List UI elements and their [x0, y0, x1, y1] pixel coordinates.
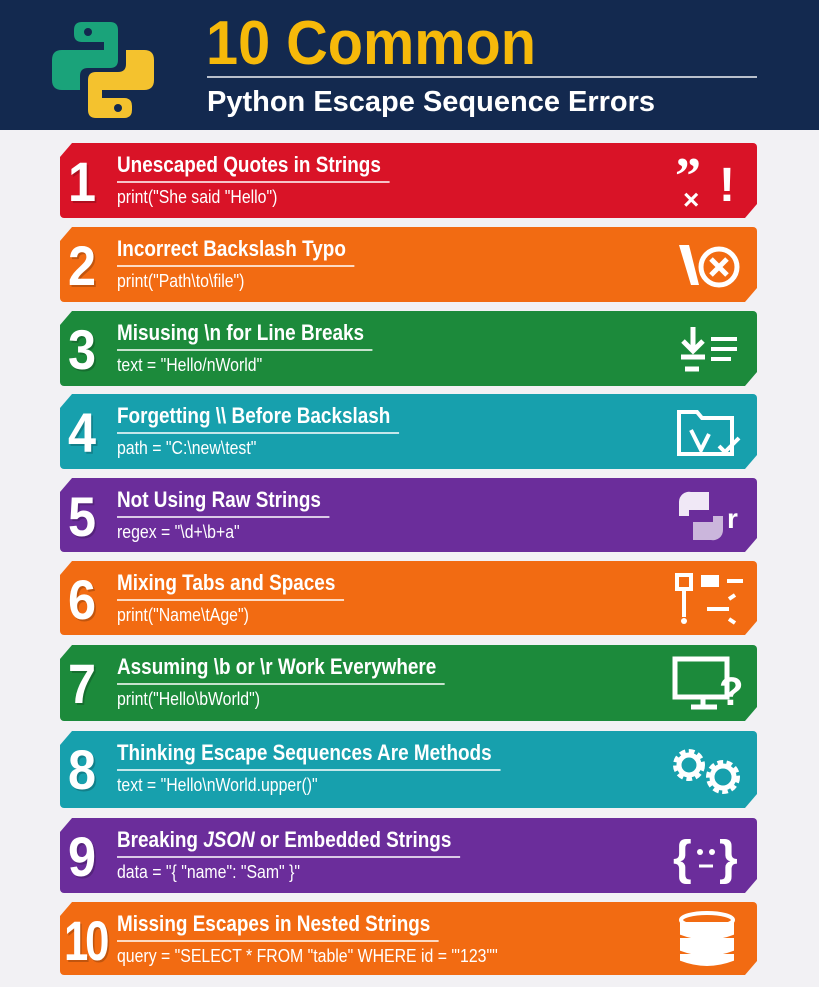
icon: python r — [679, 492, 738, 540]
icon: tabs — [675, 573, 743, 625]
card 6 — [60, 561, 757, 635]
card 10: query = "SELECT * FROM "table" WHERE id = "'123"" — [117, 946, 498, 966]
card 1: print("She said "Hello") — [117, 187, 277, 207]
card 3: Misusing \n for Line Breaks — [117, 320, 364, 345]
card 4: 4 — [68, 401, 96, 464]
card 1: Unescaped Quotes in Strings — [117, 152, 381, 177]
icon: database — [679, 911, 735, 966]
icon: quote x — [676, 158, 730, 207]
card 1: 1 — [68, 150, 96, 213]
title: 10 Common — [206, 9, 536, 78]
card 5: regex = "\d+\b+a" — [117, 522, 240, 542]
icon: braces: } — [719, 832, 738, 885]
card 2: print("Path\to\file") — [117, 271, 244, 291]
card 7 — [60, 645, 757, 721]
card 2: Incorrect Backslash Typo — [117, 236, 346, 261]
card 2 — [60, 227, 757, 302]
card 7: Assuming \b or \r Work Everywhere — [117, 654, 436, 679]
icon: braces — [674, 839, 737, 884]
card 6: 6 — [68, 568, 96, 631]
card 8: 8 — [68, 738, 96, 801]
icon: line break — [681, 327, 737, 372]
card 10: Missing Escapes in Nested Strings — [117, 911, 430, 936]
icon: monitor question: ? — [719, 670, 743, 713]
card 4: Forgetting \\ Before Backslash — [117, 403, 390, 428]
card 2: 2 — [68, 234, 96, 297]
card 5: 5 — [68, 485, 96, 548]
card 4: path = "C:\new\test" — [117, 438, 256, 458]
icon: monitor question — [672, 656, 742, 710]
card 1 — [60, 143, 757, 218]
icon: python r: r — [727, 503, 738, 534]
card 3: 3 — [68, 318, 96, 381]
card 5: Not Using Raw Strings — [117, 487, 321, 512]
card 3 — [60, 311, 757, 386]
icon: quote x: ” — [675, 149, 701, 205]
card 10: 10 — [64, 909, 106, 972]
card 7: print("Hello\bWorld") — [117, 689, 260, 709]
card 8 — [60, 731, 757, 808]
icon: braces: { — [673, 832, 692, 885]
card 8: Thinking Escape Sequences Are Methods — [117, 740, 492, 765]
card 8: text = "Hello\nWorld.upper()" — [117, 775, 318, 795]
card 9: data = "{ "name": "Sam" }" — [117, 862, 300, 882]
icon: gears — [673, 749, 740, 794]
card 10 — [60, 902, 757, 975]
icon: python logo — [52, 22, 154, 118]
card 5 — [60, 478, 757, 552]
card 6: print("Name\tAge") — [117, 605, 249, 625]
card 9: 9 — [68, 825, 96, 888]
header — [0, 0, 819, 130]
icon: folder — [677, 410, 740, 456]
card 9: Breaking JSON or Embedded Strings — [117, 827, 451, 852]
subtitle: Python Escape Sequence Errors — [207, 86, 655, 118]
card 4 — [60, 394, 757, 469]
icon: quote x: ! — [719, 159, 735, 211]
icon: backslash x — [679, 245, 740, 288]
card 7: 7 — [68, 652, 96, 715]
card 3: text = "Hello/nWorld" — [117, 355, 262, 375]
card 9 — [60, 818, 757, 893]
card 6: Mixing Tabs and Spaces — [117, 570, 335, 595]
